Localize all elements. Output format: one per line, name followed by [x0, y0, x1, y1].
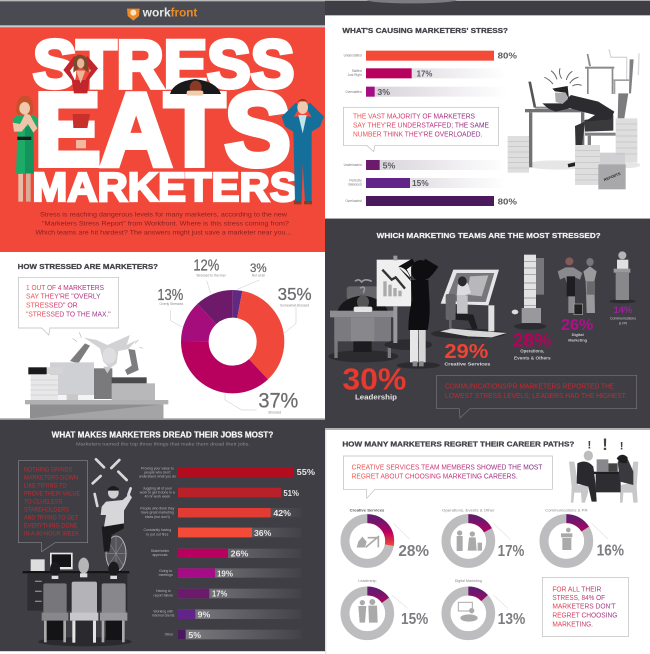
chart: communications 16%: [544, 508, 624, 563]
chart: dread bars: 9%: [198, 609, 211, 619]
chart: creative services 28%: 28%: [398, 543, 429, 560]
chart: dread bars: 55%: [297, 467, 315, 477]
callout: 84% don't regret: [542, 577, 628, 637]
illustration: stressed man at laptop: [508, 49, 640, 189]
chart labels: donut: Stressed: [268, 410, 281, 414]
figure: person slumped on title: [170, 79, 221, 96]
chart: dread bars: understand what you do: [139, 475, 176, 479]
callout: understaffed: NUMBER THINK THEY'RE OVERLOADED.: [353, 129, 482, 138]
chart: dread bars: Having to: [156, 589, 171, 593]
stat: operations 28%: Events & Others: [514, 356, 551, 361]
chart: operations 17%: 17%: [498, 543, 525, 560]
callout: lowest stress levels: [437, 375, 637, 418]
chart: workload bars bottom: 15%: [412, 178, 429, 188]
illustration: couple at table: !: [620, 440, 624, 452]
chart labels: donut: Overly Stressed: [159, 302, 183, 306]
callout: understaffed: THE VAST MAJORITY OF MARKETERS: [353, 112, 475, 121]
illustration: stressed person at desk: [25, 332, 168, 418]
callout: nothing grinds: LIKE TRYING TO: [24, 483, 67, 490]
figure: woman in green: [13, 96, 37, 202]
chart: communications 16%: 16%: [597, 542, 624, 559]
chart: workload bars bottom: Perfectly: [349, 179, 362, 183]
callout: understaffed: SAY THEY'RE UNDERSTAFFED; THE SAME: [353, 121, 489, 130]
callout: understaffed: [343, 107, 499, 152]
chart labels: donut: 3%: [250, 261, 267, 275]
stat: leadership 30%: 30%: [342, 362, 406, 396]
chart: dread bars: 51%: [283, 488, 299, 498]
stat: communications 14%: & PR: [619, 321, 628, 325]
chart: leadership 15%: 15%: [401, 611, 429, 628]
figure: woman in red: [63, 55, 98, 148]
chart: dread bars: people who don't: [144, 470, 170, 474]
chart: dread bars: Juggling all of your: [143, 486, 173, 490]
panel: what makes marketers dread their jobs: [0, 420, 325, 654]
stat: digital marketing 26%: 26%: [561, 317, 593, 334]
stat: digital marketing 26%: Marketing: [568, 337, 588, 342]
callout: lowest stress levels: LOWEST STRESS LEVELS; LEADERS HAD THE HIGHEST.: [445, 393, 627, 400]
callout: 84% don't regret: STRESS, 84% OF: [552, 595, 605, 602]
callout: 1 out of 4: "STRESSED TO THE MAX.": [26, 309, 111, 318]
callout: nothing grinds: TO CLUELESS: [24, 499, 62, 506]
callout: nothing grinds: MARKETERS DOWN: [24, 475, 78, 482]
chart: stress donut: [195, 304, 270, 379]
chart: dread bars: Other: [165, 633, 174, 637]
stat: digital marketing 26%: [561, 317, 593, 342]
callout: 84% don't regret: MARKETERS DON'T: [552, 604, 616, 611]
chart labels: donut: 35%: [278, 284, 312, 304]
chart: dread bars: to put out fires: [146, 532, 169, 536]
chart: workload bars bottom: 80%: [498, 196, 517, 206]
callout: creative services regret: [343, 456, 552, 498]
stat: communications 14%: Communications: [610, 317, 636, 321]
panel: how stressed are marketers: [0, 250, 325, 420]
subheading: Marketers named the top three things that make them dread their jobs.: [76, 442, 250, 448]
text: intro: Which teams are hit hardest? The answers might just save a marketer near you...: [35, 229, 291, 236]
illustration: couple at table: !: [587, 440, 591, 452]
illustration: communications podium: [609, 251, 636, 303]
logo: workfront: front: [171, 6, 197, 20]
chart: dread bars: work to get it done in a: [140, 490, 175, 494]
chart: dread bars: internal clients: [152, 614, 175, 618]
callout: 1 out of 4: [18, 277, 119, 335]
chart: dread bars: meetings: [159, 573, 173, 577]
chart: dread bars: 19%: [217, 568, 233, 578]
chart: creative services 28%: Creative Services: [350, 509, 384, 513]
chart: workload bars top: [344, 51, 517, 97]
callout: 1 out of 4: 1 OUT OF 4 MARKETERS: [26, 283, 104, 292]
callout: nothing grinds: [18, 461, 88, 552]
chart: workload bars top: 3%: [377, 87, 390, 97]
chart labels: donut: 37%: [258, 388, 298, 412]
illustration: leadership: [328, 280, 398, 362]
stat: operations 28%: Operations,: [520, 349, 544, 354]
chart: workload bars bottom: 5%: [383, 161, 396, 171]
panel: which marketing teams are the most stressed: [325, 218, 650, 430]
chart: workload bars bottom: Underloaded: [344, 163, 362, 167]
chart: creative services 28%: [345, 509, 429, 563]
callout: 1 out of 4: STRESSED" OR: [26, 300, 78, 309]
illustration: woman at flipchart: [377, 256, 440, 369]
chart labels: donut: Stressed to the max: [196, 273, 226, 277]
chart labels: donut: 13%: [157, 287, 183, 304]
chart: dread bars: ideas (but don't): [145, 515, 170, 519]
chart: dread bars: 26%: [231, 549, 249, 559]
illustration: three people in chairs at desk: [23, 553, 132, 646]
illustration: stressed man at laptop: REPORTS: [603, 172, 622, 182]
callout: nothing grinds: EVERYTHING DONE: [24, 522, 77, 529]
chart: dread bars: People who think they: [140, 507, 175, 511]
stat: creative services 29%: 29%: [444, 340, 488, 363]
callout: 84% don't regret: MARKETING.: [552, 622, 593, 629]
chart: workload bars top: Just Right: [348, 73, 362, 77]
callout: lowest stress levels: COMMUNICATIONS/PR MARKETERS REPORTED THE: [445, 384, 615, 391]
panel: what's causing marketers' stress: [325, 0, 650, 220]
callout: nothing grinds: STAKEHOLDERS: [24, 507, 69, 514]
chart: workload bars top: Staffed: [352, 69, 362, 73]
text: intro: [35, 212, 291, 236]
title: stress eats marketers: EATS: [35, 72, 291, 187]
chart: dread bars: Stakeholder: [151, 549, 170, 553]
heading: HOW STRESSED ARE MARKETERS?: [18, 262, 159, 271]
callout: nothing grinds: NOTHING GRINDS: [24, 467, 72, 474]
chart: dread bars: have great marketing: [141, 511, 174, 515]
stat: communications 14%: 14%: [614, 305, 632, 315]
figure: man in blue suit: [282, 99, 324, 204]
chart labels: donut: Somewhat stressed: [280, 303, 309, 307]
chart: operations 17%: Operations, Events & Other: [442, 508, 495, 512]
callout: nothing grinds: AND TRYING TO GET: [24, 515, 78, 522]
chart: dread bars: Going to: [159, 569, 172, 573]
stat: communications 14%: [610, 305, 636, 325]
stat: creative services 29%: Creative Services: [444, 361, 491, 366]
chart labels: donut: [157, 258, 312, 414]
callout: nothing grinds: PROVE THEIR VALUE: [24, 491, 80, 498]
callout: 1 out of 4: SAY THEY'RE "OVERLY: [26, 292, 101, 301]
callout: 84% don't regret: REGRET CHOOSING: [552, 613, 617, 620]
chart: leadership 15%: [345, 579, 429, 636]
illustration: couple at table: [569, 435, 638, 503]
title: stress eats marketers: MARKETERS: [32, 164, 298, 210]
illustration: digital marketing: [558, 257, 597, 315]
chart: communications 16%: Communications & PR: [545, 508, 588, 512]
text: intro: "Marketers Stress Report" from Workfront. Where is this stress coming from?: [42, 220, 289, 227]
chart: dread bars: 42%: [273, 508, 291, 518]
chart: digital marketing 13%: 13%: [498, 611, 526, 628]
chart: digital marketing 13%: [446, 579, 526, 636]
chart: workload bars bottom: [344, 160, 517, 206]
chart labels: donut: 12%: [193, 258, 219, 275]
chart: workload bars top: Understaffed: [344, 54, 362, 58]
chart labels: donut: Not at all: [252, 273, 265, 277]
chart: workload bars top: 80%: [498, 51, 517, 61]
heading: WHAT'S CAUSING MARKETERS' STRESS?: [342, 26, 509, 35]
callout: nothing grinds: IN A 40-HOUR WEEK: [24, 530, 80, 537]
chart: workload bars bottom: Overloaded: [345, 199, 362, 203]
logo: workfront: work: [142, 6, 171, 20]
chart: workload bars top: 17%: [417, 69, 433, 79]
title: stress eats marketers: [32, 27, 298, 210]
text: intro: Stress is reaching dangerous levels for many marketers, according to the new: [40, 212, 287, 219]
chart: operations 17%: [442, 508, 525, 563]
callout: 84% don't regret: FOR ALL THEIR: [552, 586, 601, 593]
logo: workfront: [127, 6, 197, 21]
stat: digital marketing 26%: Digital: [572, 332, 584, 337]
illustration: couple at table: !: [602, 435, 608, 454]
chart: dread bars: Working with: [153, 610, 173, 614]
illustration: creative services: [431, 270, 507, 339]
panel: how many marketers regret their career paths: [325, 430, 650, 654]
stat: operations 28%: 28%: [513, 330, 552, 351]
panel: hero: [0, 0, 325, 250]
callout: creative services regret: REGRET ABOUT CHOOSING MARKETING CAREERS.: [352, 471, 518, 480]
chart: dread bars: [139, 466, 315, 640]
heading: WHICH MARKETING TEAMS ARE THE MOST STRESSED?: [377, 231, 601, 240]
chart: workload bars bottom: Balanced: [348, 183, 362, 187]
chart: dread bars: 40-hr work week: [145, 495, 170, 499]
stat: leadership 30%: Leadership: [355, 395, 397, 402]
callout: creative services regret: CREATIVE SERVICES TEAM MEMBERS SHOWED THE MOST: [352, 463, 543, 472]
stat: operations 28%: [513, 330, 552, 361]
heading: WHAT MAKES MARKETERS DREAD THEIR JOBS MOST?: [52, 431, 273, 440]
chart: workload bars top: Overstaffed: [345, 90, 362, 94]
illustration: operations: [512, 255, 546, 330]
heading: HOW MANY MARKETERS REGRET THEIR CAREER PATHS?: [342, 440, 575, 449]
title: stress eats marketers: STRESS: [33, 27, 294, 103]
chart: dread bars: Constantly having: [143, 528, 171, 532]
chart: digital marketing 13%: Digital Marketing: [455, 579, 482, 583]
chart: dread bars: 5%: [188, 630, 201, 640]
chart: dread bars: approvals: [152, 553, 168, 557]
illustration: juggler on unicycle: [93, 459, 132, 571]
chart: dread bars: 17%: [212, 589, 228, 599]
chart: dread bars: Proving your value to: [141, 466, 174, 470]
chart: dread bars: 36%: [254, 528, 272, 538]
chart: dread bars: report failure: [154, 593, 173, 597]
chart: leadership 15%: Leadership: [358, 579, 376, 583]
